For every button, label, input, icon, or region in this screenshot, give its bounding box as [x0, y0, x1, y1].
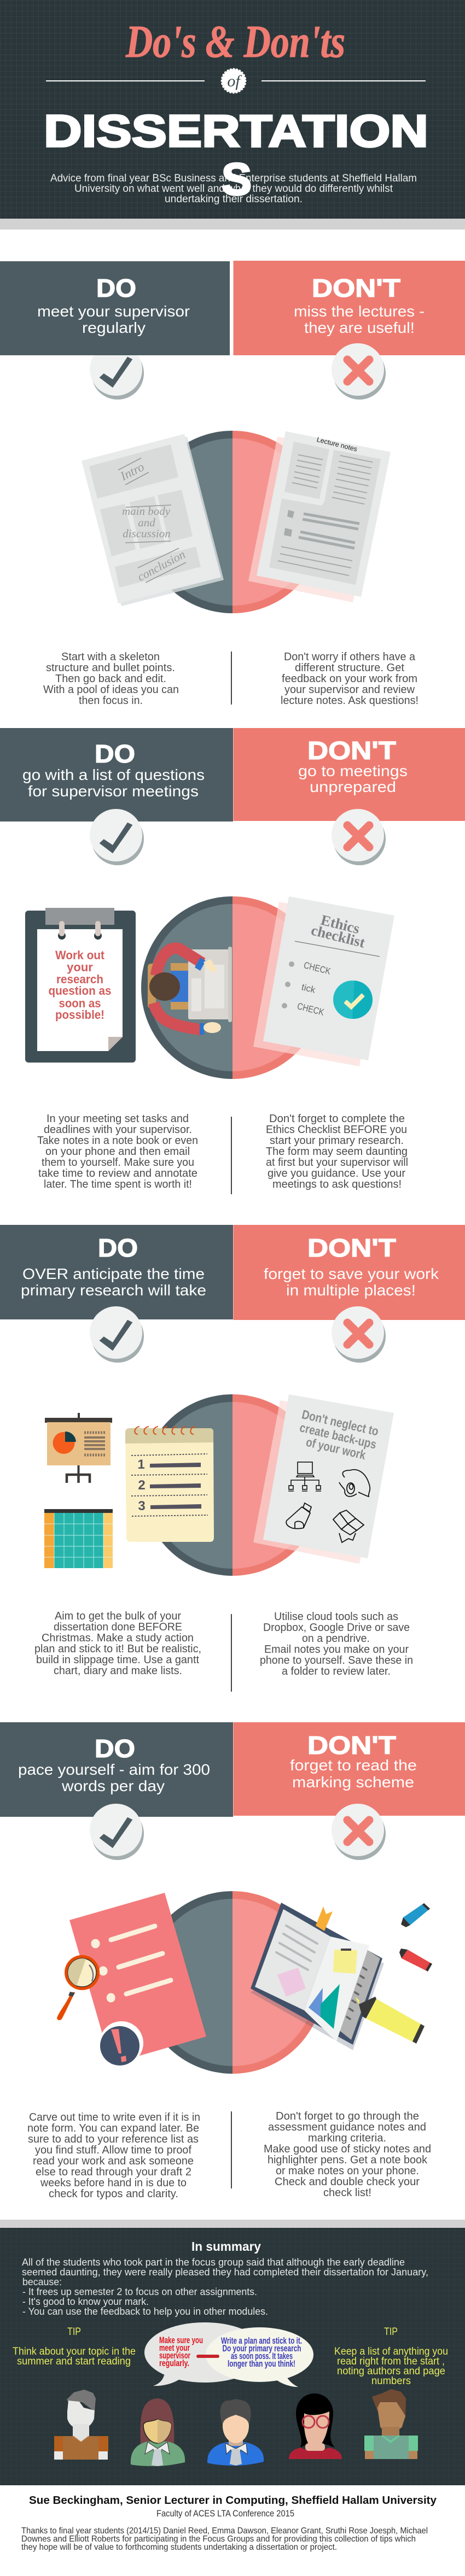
do subheading: [22, 766, 205, 800]
paper: skeleton structure: and: [138, 516, 155, 529]
speech bubble: right: Do your primary research: [222, 2343, 301, 2354]
icon: tick: [90, 343, 144, 400]
panel: row 3 do: [0, 1225, 233, 1319]
panel: row 4 don't: [233, 1722, 465, 1816]
notepad: 2: [138, 1478, 146, 1493]
text: row 4 do advice: you find stuff. Allow time to proof: [35, 2144, 191, 2156]
text: row 1 do advice: Start with a skeleton: [61, 651, 160, 663]
avatar: woman with auburn hair: [131, 2398, 185, 2466]
tip: right: read right from the start ,: [337, 2356, 445, 2367]
text: row 1 don't advice: different structure. Get: [295, 662, 404, 674]
illustration: planning tools and back-ups: [44, 1394, 394, 1576]
text: row 2 don't advice: start your primary research.: [270, 1135, 404, 1147]
text: row 3 do advice: build in slippage time. Use a gantt: [36, 1654, 199, 1666]
text: row 2 don't advice: [266, 1113, 408, 1190]
icon: tick: [90, 1804, 144, 1860]
thanks text: [21, 2526, 428, 2552]
illustration: writing and marking scheme: [57, 1891, 432, 2074]
intro text: [50, 173, 417, 205]
text: row 3 do advice: Christmas. Make a study action: [42, 1632, 194, 1644]
don't subheading: forget to read the: [290, 1757, 417, 1774]
tip: right: TIP: [384, 2326, 398, 2338]
conference line: Faculty of ACES LTA Conference 2015: [156, 2508, 294, 2519]
do subheading: meet your supervisor: [37, 303, 190, 320]
do subheading: [37, 303, 190, 336]
paper: skeleton structure: main body: [122, 504, 171, 518]
avatars: [54, 2389, 418, 2466]
text: row 3 do advice: plan and stick to it! But be realistic,: [34, 1643, 201, 1655]
paper: ethics checklist: CHECK: [303, 960, 332, 977]
text: row 2 don't advice: Don't forget to complete the: [269, 1113, 405, 1125]
text: row 1 do advice: [43, 651, 179, 707]
text: row 1 do advice: Then go back and edit.: [55, 673, 166, 685]
speech bubble: right: as soon poss. It takes: [231, 2351, 293, 2361]
avatar: woman with glasses: [289, 2393, 342, 2459]
paper: skeleton structure: discussion: [123, 527, 171, 540]
text: row 2 do advice: deadlines with your supervisor.: [44, 1124, 192, 1136]
text: row 3 don't advice: a folder to review later.: [282, 1665, 391, 1677]
tip: left: Think about your topic in the: [13, 2346, 136, 2357]
panel: row 3 don't: [233, 1225, 465, 1320]
text: row 4 do advice: else to read through your draft 2: [36, 2166, 191, 2178]
text: row 3 don't advice: on a pendrive.: [302, 1633, 370, 1645]
tip: right: numbers: [371, 2375, 411, 2387]
text: row 4 don't advice: marking criteria.: [308, 2132, 386, 2144]
summary text: - It frees up semester 2 to focus on other assignments.: [22, 2286, 257, 2297]
heading: don't: DON'T: [307, 1731, 396, 1759]
icon: magnifier: [57, 1955, 100, 2020]
icon: yellow highlighter: [355, 1997, 425, 2044]
paper: back-ups: create back-ups: [298, 1420, 378, 1452]
clipboard message: Work out: [55, 948, 105, 962]
icon: cloud: [339, 1470, 370, 1497]
paper: ethics checklist: [253, 896, 394, 1066]
clipboard message: your: [67, 960, 93, 974]
half-circle background: [142, 1394, 323, 1576]
paper: ethics checklist: CHECK: [296, 1001, 326, 1018]
paper: ethics checklist: tick: [300, 982, 317, 995]
author line: Sue Beckingham, Senior Lecturer in Computing, Sheffield Hallam University: [29, 2495, 437, 2507]
text: row 2 don't advice: The form may seem daunting: [266, 1146, 408, 1158]
text: row 2 don't advice: at first but your supervisor will: [266, 1157, 408, 1169]
pink paper with bullets: [69, 1893, 206, 2064]
clipboard message: soon as: [59, 996, 101, 1010]
text: row 2 don't advice: Ethics Checklist BEFORE you: [266, 1124, 407, 1136]
thanks text: Downes and Elliott Roberts for participating in the Focus Groups and for providing this collection of tips which: [21, 2534, 416, 2544]
icon: usb drive: [286, 1503, 311, 1529]
don't subheading: marking scheme: [292, 1774, 414, 1791]
half-circle background: [141, 431, 324, 613]
paper: skeleton structure: [82, 434, 224, 606]
text: row 3 do advice: chart, diary and make lists.: [54, 1665, 182, 1677]
text: row 1 don't advice: your supervisor and review: [284, 684, 415, 696]
text: row 1 do advice: structure and bullet points.: [46, 662, 175, 674]
summary text: - It's good to know your mark.: [22, 2296, 149, 2307]
text: row 4 do advice: sure to add to your reference list as: [28, 2133, 199, 2145]
notepad: 1: [137, 1457, 145, 1472]
panel: row 1 don't: [233, 261, 465, 400]
text: row 4 don't advice: Make good use of sticky notes and: [264, 2143, 431, 2155]
text: row 4 do advice: Carve out time to write even if it is in: [29, 2111, 200, 2123]
icon: cross: [332, 809, 386, 865]
text: row 2 do advice: on your phone and then email: [45, 1146, 190, 1158]
paper: skeleton structure: Intro: [118, 460, 147, 483]
text: row 3 don't advice: Email notes you make on your: [264, 1644, 409, 1656]
do subheading: OVER anticipate the time: [22, 1265, 205, 1282]
heading: do: DO: [95, 740, 135, 768]
open book: [251, 1903, 384, 2050]
icon: teal check badge: [333, 981, 373, 1019]
heading: do: DO: [95, 1734, 135, 1763]
icon: red marker: [399, 1949, 432, 1971]
calendar: [44, 1509, 113, 1568]
panel: summary: [0, 2220, 465, 2485]
half-circle background: [141, 896, 324, 1079]
clipboard message: question as: [48, 984, 112, 997]
text: row 2 do advice: In your meeting set tasks and: [47, 1113, 189, 1125]
do subheading: pace yourself - aim for 300: [18, 1761, 210, 1778]
divider lines with of badge: [46, 69, 426, 92]
do subheading: [21, 1265, 206, 1299]
text: row 2 don't advice: give you guidance. Use your: [268, 1167, 405, 1180]
text: row 4 do advice: read your work and ask someone: [33, 2155, 194, 2167]
do subheading: regularly: [82, 319, 146, 336]
text: row 2 do advice: Take notes in a note book or even: [37, 1135, 198, 1147]
clipboard: [25, 908, 136, 1063]
tip: right: [334, 2326, 448, 2387]
heading: do: DO: [98, 1234, 138, 1262]
icon: blue marker: [401, 1903, 430, 1927]
clipboard message: possible!: [55, 1008, 104, 1022]
paper: lecture notes: Lecture notes: [316, 436, 358, 453]
panel: row 2 do: [0, 728, 233, 821]
text: row 4 don't advice: [264, 2110, 431, 2199]
text: row 2 don't advice: meetings to ask questions!: [272, 1178, 402, 1190]
tip: right: Keep a list of anything you: [334, 2346, 448, 2357]
text: row 2 do advice: them to yourself. Make sure you: [42, 1157, 194, 1169]
paper: back-ups: of your work: [305, 1435, 367, 1462]
thanks text: they hope will be of value to forthcoming students undertaking a dissertation or project.: [21, 2543, 337, 2552]
paper: ethics checklist: checklist: [310, 922, 367, 951]
intro text: Advice from final year BSc Business and Enterprise students at Sheffield Hallam: [50, 173, 417, 184]
notepad: 3: [138, 1499, 146, 1513]
title: Do's & Don'ts: Do's & Don'ts: [125, 16, 345, 67]
speech bubble: left: Make sure you: [159, 2335, 203, 2345]
panel: row 2 don't: [233, 728, 465, 821]
speech bubble: left: regularly.: [159, 2358, 189, 2368]
summary text: - You can use the feedback to help you in other modules.: [22, 2305, 268, 2317]
text: row 1 do advice: With a pool of ideas you can: [43, 684, 179, 696]
text: row 4 do advice: check for typos and clarity.: [49, 2188, 178, 2200]
tip: right: noting authors and page: [337, 2366, 445, 2377]
do subheading: words per day: [61, 1777, 165, 1794]
speech bubble: right: longer than you think!: [228, 2358, 295, 2369]
thanks text: Thanks to final year students (2014/15) Daniel Reed, Emma Dawson, Eleanor Grant, Sruthi Rose Joesph, Michael: [21, 2526, 428, 2536]
text: row 3 don't advice: Utilise cloud tools such as: [274, 1611, 398, 1623]
text: row 1 do advice: then focus in.: [79, 695, 143, 707]
icon: cross: [332, 1804, 386, 1860]
text: row 4 don't advice: highlighter pens. Get a note book: [268, 2154, 428, 2166]
paper: back-ups: Don't neglect to: [300, 1407, 380, 1439]
summary text: All of the students who took part in the focus group said that although the early deadline: [22, 2256, 405, 2268]
heading: don't: DON'T: [307, 736, 396, 765]
summary text: [22, 2256, 428, 2317]
text: row 2 do advice: [37, 1113, 198, 1190]
icon: warning badge: [100, 2021, 143, 2066]
don't subheading: miss the lectures -: [294, 303, 425, 320]
intro text: University on what went well and what they would do differently whilst: [74, 183, 393, 195]
panel: row 4 do: [0, 1722, 233, 1817]
paper: lecture notes: [248, 431, 391, 602]
text: row 4 don't advice: check list!: [323, 2187, 371, 2199]
text: row 3 do advice: Aim to get the bulk of your: [55, 1610, 181, 1622]
do subheading: primary research will take: [21, 1282, 206, 1299]
paper: back-ups: [253, 1394, 394, 1564]
panel: row 1 do: [0, 261, 230, 400]
paper: ethics checklist: Ethics: [319, 912, 362, 937]
don't subheading: forget to save your work: [264, 1265, 439, 1282]
speech bubble: right: [196, 2327, 313, 2387]
text: row 4 don't advice: Don't forget to go through the: [276, 2110, 419, 2122]
illustration: research question, desk and ethics checklist: [25, 896, 394, 1079]
don't subheading: go to meetings: [298, 762, 408, 779]
heading: don't: DON'T: [312, 274, 400, 302]
avatar: grey-haired man: [54, 2390, 108, 2460]
text: row 3 don't advice: Dropbox, Google Drive or save: [263, 1622, 410, 1634]
text: row 3 don't advice: [260, 1611, 413, 1677]
avatar: man in blue: [207, 2399, 264, 2466]
title: DISSERTATIONS: S: [222, 154, 252, 204]
text: row 2 do advice: take time to review and annotate: [38, 1167, 197, 1180]
text: row 4 do advice: weeks before hand in is due to: [40, 2177, 187, 2189]
text: row 4 don't advice: assessment guidance notes and: [268, 2121, 426, 2133]
icon: tick: [90, 809, 144, 865]
icon: dropbox: [333, 1510, 364, 1542]
don't subheading: [290, 1757, 417, 1791]
text: row 4 don't advice: or make notes on your phone.: [276, 2165, 419, 2177]
heading: don't: DON'T: [307, 1234, 396, 1262]
speech bubble: left: supervisor: [159, 2350, 190, 2361]
don't subheading: [294, 303, 425, 336]
don't subheading: unprepared: [310, 778, 396, 795]
text: row 3 do advice: dissertation done BEFORE: [54, 1621, 182, 1633]
icon: cross: [332, 1306, 386, 1363]
person at desk: [148, 947, 232, 1035]
summary text: because:: [22, 2276, 62, 2287]
heading: in summary: In summary: [191, 2239, 261, 2254]
don't subheading: they are useful!: [304, 319, 415, 336]
clipboard message: research: [56, 972, 103, 986]
heading: do: DO: [96, 274, 136, 302]
don't subheading: in multiple places!: [286, 1282, 416, 1299]
notepad: [125, 1427, 214, 1542]
speech bubble: right: Write a plan and stick to it.: [221, 2336, 302, 2346]
do subheading: [18, 1761, 210, 1794]
summary text: seemed daunting, they were really pleased they had completed their dissertation for January,: [22, 2266, 428, 2278]
don't subheading: [298, 762, 408, 795]
tip: left: [13, 2326, 136, 2367]
tip: left: summer and start reading: [17, 2356, 131, 2367]
clipboard message: [48, 948, 112, 1022]
title: DISSERTATIONS: [44, 105, 428, 204]
panel: header: [0, 0, 465, 230]
title: DISSERTATIONS: DISSERTATION: [44, 105, 428, 156]
text: row 3 don't advice: phone to yourself. Save these in: [260, 1654, 413, 1667]
do subheading: go with a list of questions: [22, 766, 205, 783]
divider lines with of badge: of: [227, 72, 242, 90]
speech bubble: left: meet your: [159, 2343, 190, 2353]
text: row 1 don't advice: feedback on your work from: [282, 673, 417, 685]
text: row 2 do advice: later. The time spent is worth it!: [44, 1178, 192, 1190]
text: row 4 do advice: [27, 2111, 200, 2200]
icon: network: [288, 1462, 321, 1491]
do subheading: for supervisor meetings: [28, 783, 199, 800]
avatar: man in green: [364, 2389, 418, 2459]
text: row 1 don't advice: [281, 651, 419, 707]
text: row 4 do advice: note form. You can expand later. Be: [27, 2122, 199, 2134]
tip: left: TIP: [67, 2326, 81, 2338]
icon: tick: [90, 1306, 144, 1363]
credits: [21, 2495, 437, 2552]
illustration: skeleton and lecture notes: [82, 431, 391, 613]
text: row 1 don't advice: Don't worry if others have a: [284, 651, 416, 663]
icon: cross: [332, 343, 386, 400]
half-circle background: [141, 1891, 324, 2074]
text: row 1 don't advice: lecture notes. Ask questions!: [281, 695, 419, 707]
paper: skeleton structure: conclusion: [135, 547, 188, 584]
don't subheading: [264, 1265, 439, 1299]
presentation board: [45, 1413, 112, 1483]
intro text: undertaking their dissertation.: [165, 193, 303, 205]
speech bubble: left: [144, 2322, 265, 2386]
text: row 4 don't advice: Check and double check your: [275, 2176, 420, 2188]
text: row 3 do advice: [34, 1610, 201, 1677]
